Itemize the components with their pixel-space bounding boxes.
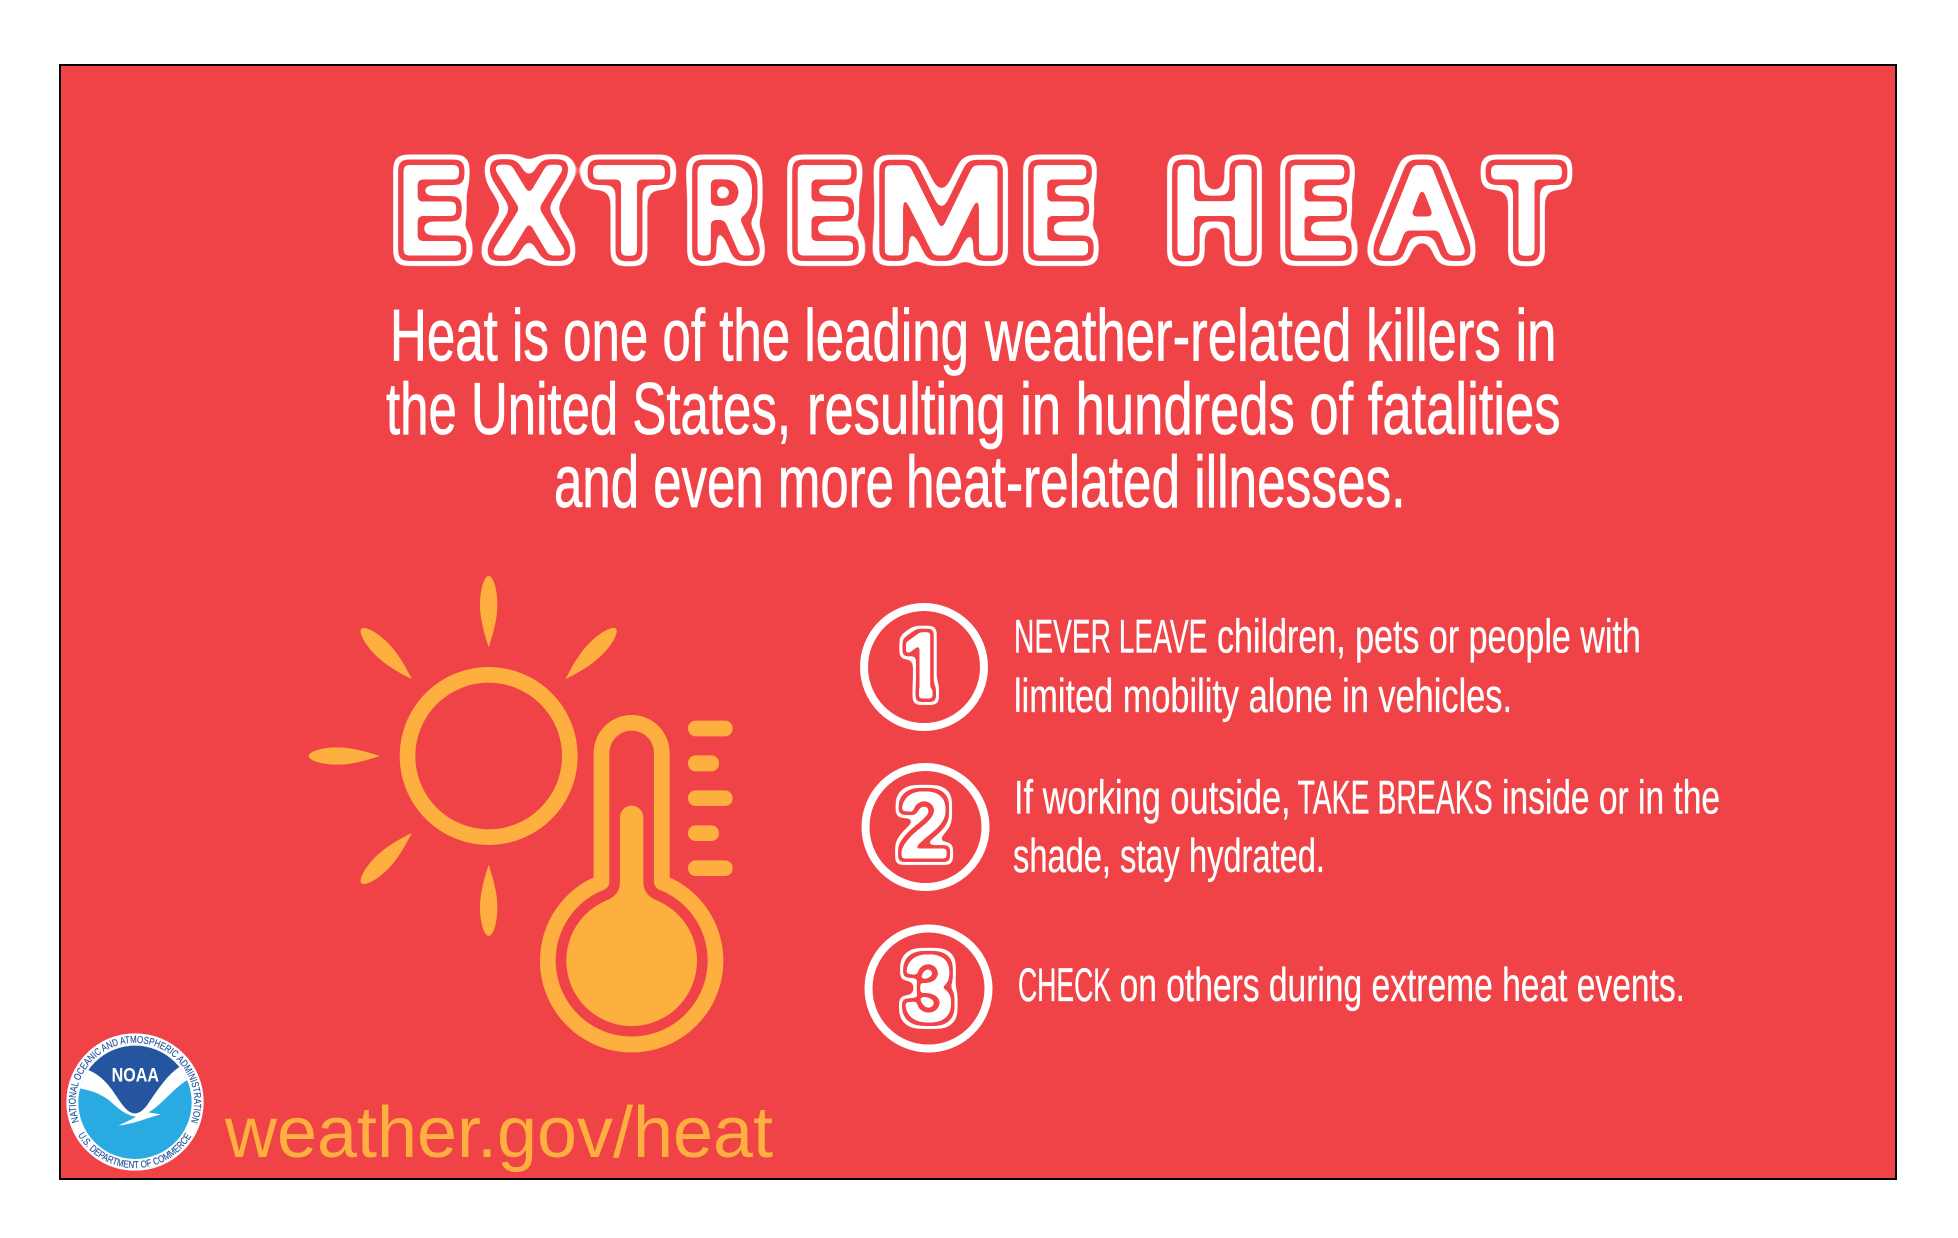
text: never leave: children, pets or people with	[1217, 610, 1641, 662]
icon: sun	[309, 576, 622, 936]
intro text block	[386, 296, 1560, 523]
intro text block: Heat is one of the leading	[390, 296, 969, 376]
list item 3	[868, 928, 1685, 1048]
number badge 1: 1	[899, 615, 948, 717]
number badge 2	[866, 767, 986, 887]
intro text block: and even more	[554, 442, 894, 523]
title: H	[1170, 142, 1259, 280]
number badge 1	[864, 607, 984, 727]
title: R	[693, 142, 756, 280]
title: E	[398, 142, 463, 280]
number badge 2: 2	[898, 775, 950, 877]
title: M	[874, 142, 1008, 280]
text: check on others: on others during extreme heat events.	[1120, 958, 1685, 1011]
title: E	[793, 142, 855, 280]
list item 2	[866, 767, 1720, 887]
text: take breaks: If working outside,	[1014, 770, 1291, 824]
icon: thermometer	[540, 715, 733, 1052]
logo: NOAA seal	[66, 1033, 204, 1171]
number badge 3	[868, 928, 988, 1048]
text: check on others: CHECK	[1018, 958, 1111, 1011]
text: take breaks	[1013, 770, 1720, 882]
intro text block: the United States,	[386, 369, 791, 450]
title: E	[1286, 142, 1348, 280]
text: take breaks: shade, stay hydrated.	[1013, 829, 1325, 882]
title: E	[1029, 142, 1090, 280]
intro text block: weather-related killers in	[984, 296, 1556, 376]
logo: NOAA seal: U.S. DEPARTMENT OF COMMERCE	[78, 1132, 192, 1168]
text: take breaks: TAKE BREAKS	[1298, 770, 1493, 824]
title: A	[1381, 142, 1463, 280]
title: T	[1491, 142, 1562, 280]
title: X	[493, 142, 565, 280]
title	[398, 142, 1562, 280]
text: take breaks: inside or in the	[1502, 770, 1720, 824]
text: never leave: NEVER LEAVE	[1014, 610, 1207, 662]
intro text block: heat-related illnesses.	[906, 442, 1406, 523]
logo: NOAA seal: NOAA	[112, 1066, 159, 1087]
number badge 3: 3	[904, 938, 954, 1040]
list item 1	[864, 607, 1641, 727]
title: T	[593, 142, 665, 280]
icon: sun and thermometer	[309, 576, 733, 1052]
text: never leave: limited mobility alone in vehicles.	[1014, 669, 1512, 722]
website link: weather.gov/heat	[224, 1093, 773, 1173]
intro text block: resulting in hundreds of fatalities	[807, 369, 1560, 450]
logo: NOAA seal: NATIONAL OCEANIC AND ATMOSPHERIC ADMINISTRATION	[68, 1036, 202, 1124]
text: never leave	[1014, 610, 1641, 722]
